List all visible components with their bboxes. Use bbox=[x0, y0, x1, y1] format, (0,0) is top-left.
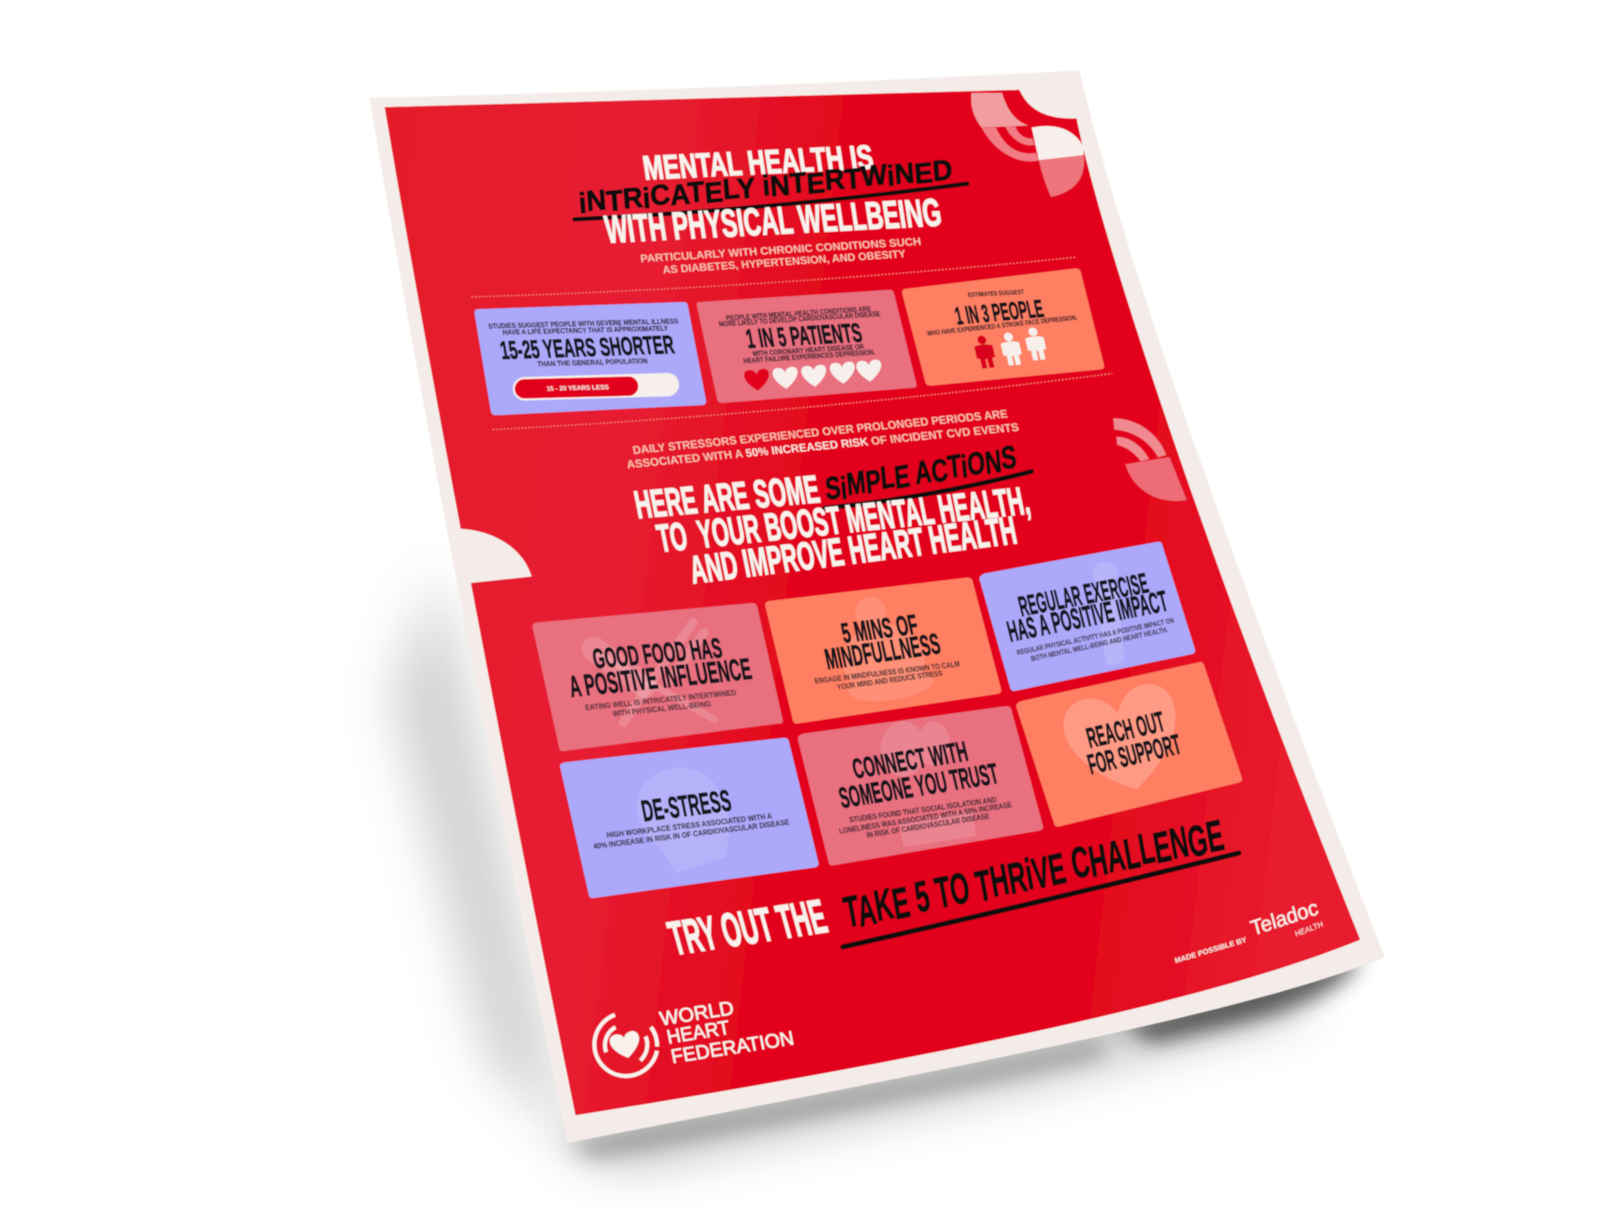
panel: regular exercise: REGULAR EXERCISE bbox=[1015, 567, 1151, 622]
title line three: WITH PHYSICAL WELLBEING bbox=[602, 192, 944, 252]
decoration: top right shapes bbox=[971, 93, 1084, 197]
panel: good food: A POSITIVE INFLUENCE bbox=[566, 653, 754, 704]
panel: regular exercise: REGULAR PHYSICAL ACTIVITY HAS A POSITIVE IMPACT ON bbox=[1016, 616, 1175, 657]
panel: connect: CONNECT WITH bbox=[849, 736, 971, 784]
underline stroke bbox=[824, 471, 1032, 508]
logo: World Heart Federation bbox=[589, 997, 796, 1082]
icon: three people bbox=[972, 327, 1049, 369]
icon: head silhouette bbox=[637, 768, 729, 873]
panel: 1 in 3 people: WHO HAVE EXPERIENCED A STROKE FACE DEPRESSION. bbox=[926, 315, 1078, 338]
panel: connect: SOMEONE YOU TRUST bbox=[836, 758, 1002, 815]
subtitle bbox=[639, 236, 922, 276]
panel: life expectancy bbox=[474, 302, 706, 415]
icon: fork and knife bbox=[594, 622, 714, 722]
icon: heart rings bbox=[589, 1007, 663, 1082]
panel: de-stress: 40% INCREASE IN RISK IN OF CARDIOVASCULAR DISEASE bbox=[592, 818, 790, 851]
drop shadow bbox=[393, 571, 1362, 1163]
panel: 1 in 3 people: ESTIMATES SUGGEST bbox=[967, 289, 1025, 299]
panel: 1 in 5 patients: HEART FAILURE EXPERIENCES DEPRESSION. bbox=[742, 347, 876, 365]
title: MENTAL HEALTH IS bbox=[640, 139, 876, 188]
icon: five hearts bbox=[744, 359, 883, 392]
sponsor credit bbox=[1174, 896, 1324, 965]
icon: two people bbox=[881, 721, 976, 847]
panel: de-stress bbox=[560, 738, 819, 898]
icon: meditating person bbox=[843, 597, 935, 706]
handwritten phrase: SiMPLE ACTiONS bbox=[824, 437, 1018, 509]
logo: World Heart Federation: FEDERATION bbox=[669, 1028, 796, 1068]
panel: life expectancy: THAN THE GENERAL POPULATION bbox=[537, 356, 648, 368]
panel: 1 in 5 patients bbox=[697, 290, 917, 403]
paper sheet bbox=[369, 70, 1385, 1143]
panel: 1 in 5 patients: MORE LIKELY TO DEVELOP CARDIOVASCULAR DISEASE bbox=[718, 309, 881, 329]
panel: de-stress: DE-STRESS bbox=[639, 785, 734, 828]
panel: regular exercise: HAS A POSITIVE IMPACT bbox=[1004, 585, 1171, 649]
panel: mindfulness: ENGAGE IN MINDFULNESS IS KNOWN TO CALM bbox=[814, 659, 961, 686]
panel: regular exercise: BOTH MENTAL WELL-BEING AND HEART HEALTH. bbox=[1030, 625, 1169, 663]
panel: 1 in 5 patients: WITH CORONARY HEART DISEASE OR bbox=[752, 342, 865, 358]
stressors statement: DAILY STRESSORS EXPERIENCED OVER PROLONGED PERIODS ARE bbox=[632, 408, 1009, 457]
stat: 1 IN 3 PEOPLE bbox=[953, 296, 1046, 330]
underline stroke bbox=[843, 853, 1239, 947]
underline stroke bbox=[574, 184, 967, 219]
call to action bbox=[663, 808, 1239, 966]
sponsor credit: MADE POSSIBLE BY bbox=[1174, 935, 1248, 965]
panel: good food: EATING WELL IS INTRICATELY INTERTWINED bbox=[584, 688, 737, 712]
heading: simple actions bbox=[631, 437, 1033, 593]
heading line three: AND IMPROVE HEART HEALTH bbox=[686, 508, 1020, 593]
panel: de-stress: HIGH WORKPLACE STRESS ASSOCIATED WITH A bbox=[606, 811, 773, 840]
subtitle: PARTICULARLY WITH CHRONIC CONDITIONS SUCH bbox=[639, 236, 922, 265]
stat: 15-25 YEARS SHORTER bbox=[498, 331, 677, 365]
panel: connect: IN RISK OF CARDIOVASCULAR DISEASE bbox=[866, 812, 990, 840]
poster bbox=[369, 70, 1385, 1143]
panel: life expectancy: HAVE A LIFE EXPECTANCY THAT IS APPROXIMATELY bbox=[502, 324, 669, 337]
decoration: left half circle bbox=[455, 529, 532, 584]
stat: 1 IN 5 PATIENTS bbox=[743, 318, 864, 354]
progress bar: 15 - 20 YEARS LESS bbox=[546, 384, 610, 393]
panel: 1 in 5 patients: PEOPLE WITH MENTAL HEALTH CONDITIONS ARE bbox=[725, 304, 872, 322]
heading line two: TO YOUR BOOST MENTAL HEALTH, bbox=[653, 479, 1033, 561]
progress bar bbox=[524, 384, 667, 393]
title bbox=[574, 139, 967, 252]
panel: mindfulness bbox=[765, 578, 1001, 724]
logo: Teladoc: Teladoc bbox=[1248, 896, 1321, 941]
handwritten challenge: TAKE 5 TO THRiVE CHALLENGE bbox=[840, 808, 1228, 939]
decoration: middle right shapes bbox=[1113, 418, 1187, 501]
panel: good food: WITH PHYSICAL WELL-BEING bbox=[612, 699, 712, 718]
panel: connect: STUDIES FOUND THAT SOCIAL ISOLATION AND bbox=[848, 795, 998, 824]
panel: life expectancy: STUDIES SUGGEST PEOPLE WITH SEVERE MENTAL ILLNESS bbox=[488, 316, 679, 331]
stressors statement: ASSOCIATED WITH A 50% INCREASED RISK OF INCIDENT CVD EVENTS bbox=[626, 422, 1020, 471]
panel: reach out: FOR SUPPORT bbox=[1084, 729, 1185, 781]
wordmark: WORLD bbox=[658, 997, 736, 1030]
panel: reach out bbox=[1016, 662, 1242, 827]
panel: 1 in 3 people bbox=[902, 268, 1104, 386]
panel: good food bbox=[532, 603, 783, 751]
icon: runner bbox=[1093, 561, 1124, 665]
logo: World Heart Federation: HEART bbox=[665, 1017, 732, 1049]
logo tagline: HEALTH bbox=[1294, 920, 1324, 939]
panel: good food: GOOD FOOD HAS bbox=[590, 632, 725, 674]
call to action: TRY OUT THE bbox=[663, 890, 833, 966]
panel: mindfulness: 5 MINS OF bbox=[838, 609, 921, 649]
panel: mindfulness: MINDFULLNESS bbox=[822, 628, 943, 676]
subtitle: AS DIABETES, HYPERTENSION, AND OBESITY bbox=[662, 248, 907, 276]
red poster background bbox=[385, 90, 1360, 1115]
heading: simple actions: HERE ARE SOME bbox=[631, 467, 823, 527]
icon: heart bbox=[1058, 679, 1192, 803]
handwritten phrase: iNTRiCATELY iNTERTWiNED bbox=[577, 152, 954, 222]
panel: regular exercise bbox=[979, 542, 1195, 691]
panel: mindfulness: YOUR MIND AND REDUCE STRESS bbox=[836, 669, 943, 692]
panel: reach out: REACH OUT bbox=[1083, 706, 1168, 755]
panel: connect bbox=[798, 706, 1043, 866]
panel: connect: LONELINESS WAS ASSOCIATED WITH A 50% INCREASE bbox=[838, 800, 1013, 836]
